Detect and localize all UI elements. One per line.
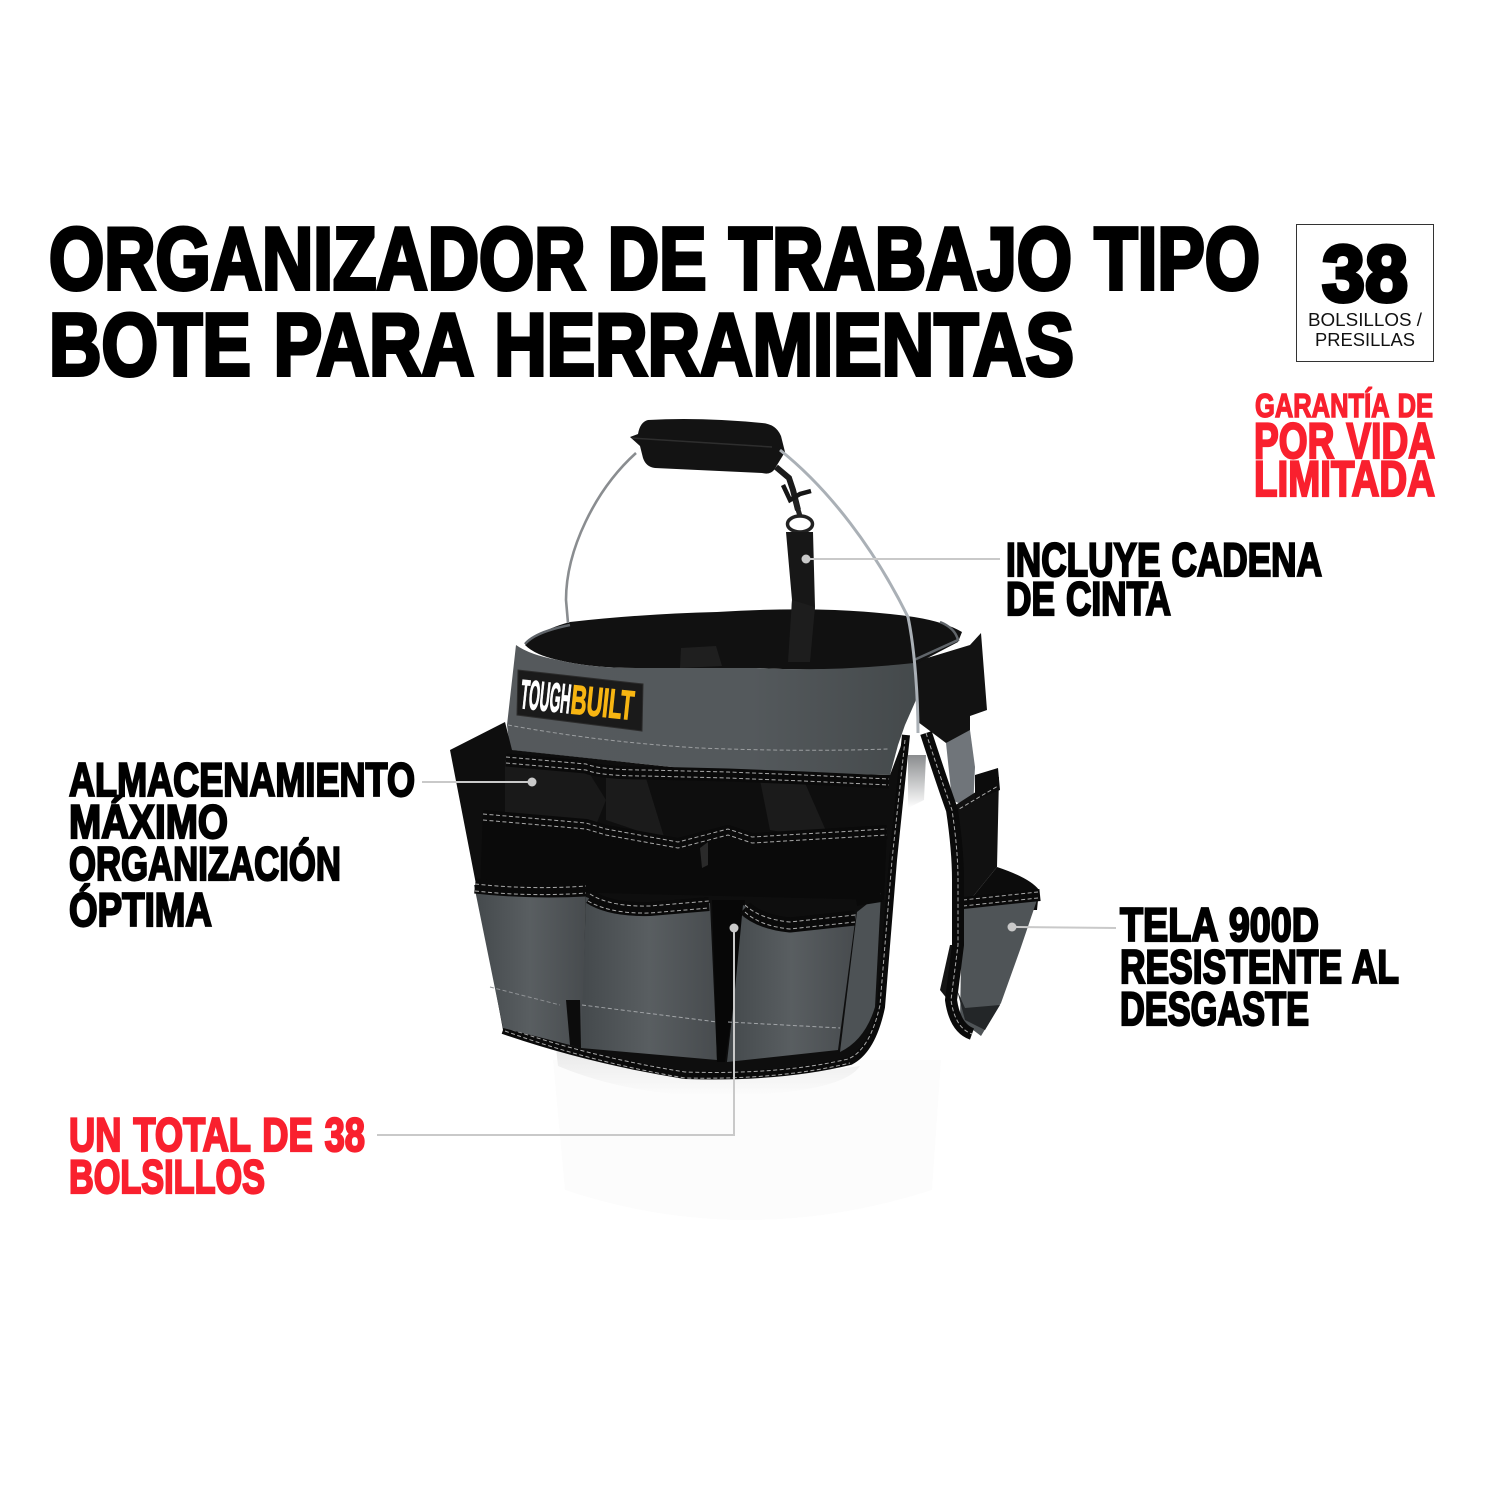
main pocket panel xyxy=(450,722,906,1078)
bucket xyxy=(553,755,941,1220)
warranty text: LIMITADA xyxy=(1254,451,1435,507)
side black pockets xyxy=(954,777,999,950)
pocket 3 xyxy=(727,905,856,1062)
side pocket set xyxy=(926,733,1040,1036)
upper pocket shading xyxy=(505,760,606,850)
title: BOTE PARA HERRAMIENTAS xyxy=(49,295,1074,394)
panel edge binding xyxy=(503,735,906,1075)
vertical side strap xyxy=(926,733,972,1034)
callout: almacenamiento maximo xyxy=(69,753,536,936)
badge: 38 bolsillos xyxy=(1296,224,1434,362)
pocket divider bottom xyxy=(566,1000,581,1048)
gray collar xyxy=(507,645,916,775)
middle pockets xyxy=(480,812,887,900)
pocket 1 xyxy=(474,885,586,1048)
brand patch: ToughBuilt logo: BUILT xyxy=(569,676,636,729)
bottom binding stitch xyxy=(505,1031,850,1078)
side gray pocket xyxy=(960,900,1037,1036)
padded handle grip xyxy=(630,419,785,474)
warranty text xyxy=(1254,387,1435,507)
callout: tela 900D: RESISTENTE AL xyxy=(1120,940,1399,993)
callout: un total de 38 bolsillos: UN TOTAL DE 38 xyxy=(69,1108,365,1161)
webbing strap chain with clasp xyxy=(776,467,815,640)
back strap on right xyxy=(914,633,987,810)
callout: incluye cadena de cinta xyxy=(802,533,1322,625)
badge: 38 bolsillos: PRESILLAS xyxy=(1315,329,1415,350)
callout: tela 900D: DESGASTE xyxy=(1120,982,1309,1035)
pocket 2 xyxy=(581,897,717,1060)
top stitched band xyxy=(506,760,889,782)
warranty text: POR VIDA xyxy=(1254,413,1435,469)
callout: almacenamiento maximo: ALMACENAMIENTO xyxy=(69,753,415,806)
brand patch: ToughBuilt logo: TOUGH xyxy=(519,671,573,722)
callout: incluye cadena de cinta: INCLUYE CADENA xyxy=(1006,533,1322,586)
title xyxy=(49,209,1260,394)
callout: almacenamiento maximo: ÓPTIMA xyxy=(69,883,212,936)
pocket 4 xyxy=(840,893,881,1052)
organizer interior rim xyxy=(525,600,962,669)
badge: 38 bolsillos: BOLSILLOS / xyxy=(1308,309,1423,330)
badge: 38 bolsillos: 38 xyxy=(1322,229,1408,318)
callout: almacenamiento maximo: ORGANIZACIÓN xyxy=(69,837,341,890)
wire bucket handle xyxy=(566,450,918,733)
callout: almacenamiento maximo: MÁXIMO xyxy=(69,795,228,848)
callout: un total de 38 bolsillos: BOLSILLOS xyxy=(69,1150,265,1203)
callout: un total de 38 bolsillos xyxy=(69,924,738,1203)
center gap xyxy=(712,900,745,1062)
outer black panel xyxy=(450,722,905,1076)
callout: tela 900D: TELA 900D xyxy=(1120,898,1319,951)
callout: tela 900D xyxy=(1008,898,1399,1035)
callout: incluye cadena de cinta: DE CINTA xyxy=(1006,572,1171,625)
warranty text: GARANTÍA DE xyxy=(1255,387,1433,424)
